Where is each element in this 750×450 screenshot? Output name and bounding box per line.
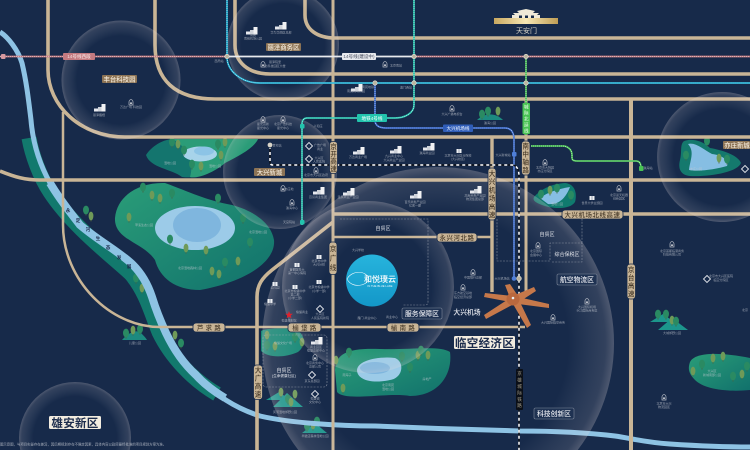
halo: service zone	[282, 201, 454, 373]
Daguang expressway	[257, 222, 333, 450]
label: line 14 west: 14号线西段	[67, 53, 91, 60]
POIs: airport area: 北京首都临港商务	[660, 248, 684, 253]
POIs: Daxing town: 黄村站	[272, 142, 282, 148]
label: airport economic zone: 临空经济区	[455, 336, 514, 350]
river name: 展	[127, 264, 132, 270]
halo: Fengtai	[62, 20, 180, 140]
POIs: north west: 南苑	[250, 32, 256, 37]
small hill parks: 凤河湿地郊野公园	[273, 409, 297, 414]
POIs: project surroundings: 第二部	[290, 292, 300, 296]
river name	[66, 207, 132, 270]
road label: Jingkai: 速	[330, 164, 337, 173]
road label: south axis: 路	[522, 166, 529, 174]
label: line 14 construction: 14号线(建设中)	[343, 53, 375, 60]
POIs: Daxing town: 义和庄	[313, 123, 323, 128]
park: east	[689, 352, 750, 391]
halo: Daxing	[223, 115, 337, 229]
POIs: airport area: 北京市大兴区医院	[709, 273, 733, 278]
POIs: Daxing town	[257, 117, 367, 224]
metro line 4	[302, 0, 414, 225]
POIs: central north: 世界大学主题园	[581, 200, 603, 205]
label: Yizhuang: 亦庄新城	[724, 140, 750, 149]
POIs: central north: 瀛海站	[643, 165, 653, 170]
road label: Jingguang: 广	[330, 254, 337, 263]
road label: airport expressway: 大	[489, 169, 496, 178]
road label: Jingtai: 速	[628, 289, 635, 298]
intercity green line north	[525, 57, 527, 135]
green branch	[531, 146, 641, 168]
park: east: 新城南部公园	[703, 372, 721, 377]
road label: airport expressway	[488, 168, 496, 220]
label: airport line: 大兴机场线	[447, 125, 470, 132]
road label: south axis: 轴	[522, 158, 529, 166]
POIs: north west: 万达广场·科技园	[120, 104, 142, 109]
road label: Jingtai	[627, 264, 636, 299]
ring road 2	[48, 0, 750, 137]
POIs: airport area: 中国银行总部	[464, 274, 482, 280]
label: bonded zone: 综合保税区	[554, 251, 580, 258]
label: Lize: 丽泽商务区	[268, 42, 300, 51]
label: free trade zone north: 自贸区	[375, 225, 391, 232]
park: large wetland with lake: 北京湿地公园	[249, 229, 267, 234]
Jingxiong intercity railway	[270, 146, 519, 450]
project logo	[346, 254, 398, 306]
POIs: airport area: 大兴国际机场	[578, 304, 596, 309]
label: Xiongan: 雄安新区	[51, 416, 99, 430]
cyan line	[227, 0, 750, 83]
POIs: project surroundings: (小学一部)	[312, 288, 326, 293]
dashed zone outlines	[263, 219, 582, 387]
Yongxing north road	[333, 236, 492, 238]
road label: airport expressway: 场	[489, 195, 496, 203]
road label: south axis	[522, 141, 530, 175]
label: free trade zone life health: (生命健康社区)	[272, 373, 296, 378]
POIs: project surroundings: 北京商务中心	[306, 360, 324, 365]
label: intercity north: 际	[524, 110, 529, 117]
POIs: project surroundings: 榆垡总部中心	[307, 348, 325, 352]
POIs: central north: 北京市大院园	[536, 164, 554, 170]
POIs: Daxing town: 北京广告科技	[274, 121, 292, 126]
park: south lake	[334, 346, 450, 397]
red star project marker	[285, 311, 293, 318]
label: intercity north: 北	[524, 116, 529, 123]
road label: south axis: 南	[522, 142, 529, 150]
POIs: project surroundings: 北京市榆垡中学	[308, 284, 330, 289]
POIs: airport area: 大兴国际临空商务	[541, 320, 565, 324]
park: Yizhuang	[679, 137, 741, 176]
POIs: project surroundings: 大兴区	[315, 311, 325, 316]
park: north Daxing	[146, 138, 258, 177]
POIs: north west	[93, 22, 412, 117]
point-of-interest labels	[93, 22, 748, 409]
river name: 发	[117, 254, 122, 261]
POIs: Daxing town: 天宫院站	[283, 219, 295, 224]
label: metro line 4	[357, 114, 387, 122]
road label: Daguang: 广	[255, 374, 262, 383]
river name: 河	[86, 226, 91, 232]
label: airport line	[443, 124, 473, 132]
halo: Lize	[227, 0, 339, 101]
POIs: central north: (大兴校区)	[451, 156, 465, 161]
road label: airport expressway: 高	[489, 202, 496, 211]
river wide section	[50, 183, 225, 398]
POIs: central north: 物流集团总部	[466, 196, 484, 201]
park: south lake: 湿地公园	[382, 386, 394, 391]
Jingkai expressway	[332, 0, 334, 450]
POIs: project surroundings: 京东总部园	[304, 378, 320, 383]
road label: Jingtai: 高	[628, 281, 635, 290]
park: south lake: 北京南苑	[382, 382, 394, 387]
transfer stations	[225, 54, 528, 281]
zone: free trade north	[340, 219, 428, 305]
POIs: project surroundings: 文化中心	[309, 399, 321, 404]
POIs: project surroundings: 大兴学校	[352, 247, 364, 252]
POIs: project surroundings: 榆垡中学	[264, 301, 276, 306]
river bank greenery	[29, 138, 217, 394]
label: logistics zone: 航空物流区	[560, 275, 594, 284]
POIs: Daxing town: 北京市大兴区政府	[304, 172, 328, 177]
road label: Yunan: 榆南路	[391, 323, 417, 332]
POIs: project surroundings: 首都医科大	[289, 266, 305, 272]
zone: free trade airport	[497, 219, 582, 262]
road label: Jingkai: 开	[330, 150, 337, 158]
POIs: airport area: 东方航空基地	[454, 290, 472, 295]
line 14 under construction	[227, 56, 414, 58]
airport line	[375, 83, 514, 278]
park: south lake: 房地产	[422, 376, 432, 381]
road label: south axis: 中	[522, 150, 529, 158]
POIs: project surroundings: 商业中心	[386, 314, 398, 319]
road label: Yufa	[288, 323, 321, 332]
park: south lake: 南海子	[342, 372, 352, 377]
icon: Tiananmen	[494, 9, 558, 35]
POIs: Daxing town: 亦庄地	[284, 186, 294, 191]
POIs: project surroundings: 总部公司	[309, 364, 321, 368]
POIs: airport area: 北京市大兴	[656, 400, 672, 406]
label: line 14 construction	[342, 53, 376, 60]
POIs: project surroundings: 榆垡规划馆	[281, 318, 297, 322]
blue station airport	[512, 276, 516, 281]
label: free trade zone: 自贸区	[539, 231, 555, 238]
road label: Jingkai	[330, 142, 338, 174]
label: Jingxiong railway: 雄	[517, 377, 522, 384]
POIs: project surroundings: 北京市中学	[311, 258, 327, 263]
park: east: 大兴区	[707, 368, 717, 373]
riverside trees	[83, 206, 184, 348]
POIs: project surroundings: 商业园区	[310, 344, 322, 349]
POIs: north west: 南苑机场公园	[347, 88, 365, 93]
label: free trade zone life health: 自贸区	[276, 367, 292, 374]
POIs: airport area	[454, 166, 748, 409]
POIs: central north: 高新商务产业园	[464, 192, 486, 198]
line stations	[1, 54, 6, 59]
label: intercity north: 城	[524, 104, 529, 111]
label: Daxing new town: 大兴新城	[257, 167, 283, 176]
POIs: central north: 北京蓝天机器	[610, 192, 628, 197]
disclaimer: 图示意图，与项目实景存在差异，因后期规划存在不确定因素，具体内容以政府最终批准的项目规划方案为准。	[0, 442, 166, 446]
POIs: north west: 华为华丽区总部	[270, 30, 292, 34]
POIs: airport area: 北京国际	[530, 248, 542, 253]
label: service zone	[402, 308, 442, 319]
POIs: project surroundings: 第一中心病院	[288, 270, 306, 275]
label: intercity north	[522, 103, 530, 134]
POIs: project surroundings: 榆垡商业	[296, 309, 308, 314]
label: logistics zone	[557, 274, 597, 285]
POIs: Daxing town: 人民医院	[313, 158, 325, 164]
POIs: north west: 丽泽院里	[269, 59, 281, 64]
POIs: central north: 亦庄分院区	[537, 168, 553, 173]
small hill parks: 半壁店森林湿地公园	[301, 433, 329, 438]
POIs: Daxing town: 商业	[317, 146, 323, 151]
POIs: airport area: 临空经济总部	[454, 294, 472, 299]
label: Jingxiong railway: 路	[517, 402, 522, 409]
POIs: Daxing town: 星光高新	[257, 121, 269, 126]
Jingtai expressway	[629, 99, 633, 450]
POIs: airport area: 科技有限公司	[663, 252, 681, 256]
POIs: project surroundings: 幼儿园	[270, 284, 280, 290]
label: Jingxiong railway: 城	[517, 383, 522, 390]
POIs: central north: 大兴广播电视台	[441, 111, 463, 116]
river name: 态	[106, 244, 111, 250]
park: large wetland with lake: 翠溪生态公园	[135, 222, 153, 227]
POIs: central north: 亿客一期	[409, 202, 421, 208]
river name: 永	[66, 207, 71, 213]
park: large wetland with lake	[115, 183, 274, 290]
road labels	[193, 141, 636, 400]
small hill parks: 瀛海公园	[484, 120, 496, 125]
stations	[1, 54, 644, 281]
road label: airport north line: 大兴机场北线高速	[565, 210, 620, 219]
road label: airport expressway: 兴	[489, 177, 496, 186]
road y180	[0, 171, 750, 180]
POIs: project surroundings: 人民医院新院	[311, 315, 329, 320]
label: tech innovation zone: 科技创新区	[537, 409, 571, 418]
thin road	[63, 112, 525, 327]
label: Jingxiong railway: 际	[517, 389, 522, 396]
teal station top	[300, 124, 304, 128]
road label: Jingtai: 台	[628, 273, 635, 282]
POIs: Daxing town: 大兴区	[314, 155, 324, 160]
road label: airport expressway: 速	[489, 210, 496, 219]
POIs: Daxing town: 万达商业广场	[349, 154, 367, 159]
small hill parks: 儿童公园	[129, 340, 141, 345]
green terminal station	[639, 166, 644, 171]
POIs: Daxing town: 广告广场	[314, 142, 326, 147]
label: Daxing new town	[254, 167, 285, 176]
POIs: airport area: BC3国际商务区	[577, 308, 597, 312]
road label: Jingtai: 京	[628, 265, 635, 274]
zone: life health	[263, 335, 327, 387]
POIs: Daxing town: 星光中心	[277, 125, 289, 130]
small hill parks	[83, 107, 688, 438]
POIs: airport area: 大兴机场站	[494, 276, 510, 280]
POIs: central north: 北京市大兴区分院校	[444, 152, 472, 158]
road label: Yongxing north	[437, 233, 477, 242]
label: line 14 west	[63, 53, 95, 60]
label: free trade zone life health	[272, 367, 296, 378]
POIs: project surroundings: 雁门·商业中心	[358, 315, 376, 320]
park: north Daxing: 湿地公园	[164, 160, 176, 165]
POIs: airport area: 会展中心	[530, 252, 542, 257]
POIs: airport area: 物流园区	[658, 404, 670, 409]
road label: Yongxing north: 永兴河北路	[440, 233, 474, 242]
label: Jingxiong railway: 京	[517, 370, 522, 377]
ring road 5	[305, 0, 750, 38]
small hill parks: 大城郊野公园	[663, 330, 681, 335]
road label: Luqiu: 芦求路	[197, 323, 223, 332]
label: metro line 4: 地铁4号线	[362, 115, 383, 122]
south axis road	[524, 99, 528, 292]
POIs: north west: 丽泽雁栖	[93, 112, 105, 117]
ring road 4	[235, 0, 750, 74]
label: Jingxiong railway	[516, 369, 523, 410]
POIs: central north: 瀛海商业园	[419, 150, 435, 155]
halo: airport economy zone	[262, 167, 614, 450]
road label: Yufa: 榆垡路	[292, 323, 319, 332]
label: Fengtai tech park: 丰台科技园	[104, 74, 135, 83]
airport north line	[333, 212, 750, 216]
POIs: project surroundings: 北京市榆垡中学	[284, 288, 306, 293]
ring road 3	[155, 0, 750, 99]
park: large wetland with lake: 北京湿地森林公园	[178, 265, 202, 270]
POIs: north west: 北京南站	[390, 62, 402, 68]
POIs: Daxing town: 温泉商业产业园	[337, 194, 359, 199]
blue station north	[512, 152, 516, 156]
road label: Yunan	[387, 323, 419, 332]
park: Yizhuang: 亦庄公园	[690, 166, 702, 171]
road label: Daguang: 高	[255, 382, 262, 391]
label: Daxing airport: 大兴机场	[453, 308, 481, 316]
road label: Jingguang: 京	[330, 244, 337, 253]
road label: Luqiu	[193, 323, 225, 332]
park: airport north	[534, 183, 576, 208]
POIs: north west: 西局站	[214, 58, 224, 63]
line labels	[63, 53, 530, 410]
POIs: central north: 创新园区	[613, 196, 625, 200]
POIs: central north: 百乐商务产业园	[404, 199, 426, 204]
POIs: central north: 大兴商业产业园	[383, 157, 405, 162]
project logo: 和悦璞云	[364, 274, 396, 284]
park: Yuhua south	[261, 328, 304, 356]
icon: Daxing airport terminal	[484, 284, 549, 328]
label: Jingxiong railway: 铁	[517, 396, 522, 403]
label: service zone: 服务保障区	[405, 309, 439, 318]
airport expressway	[490, 137, 494, 292]
road label: Jingguang: 线	[330, 263, 337, 272]
POIs: airport area: 北京	[742, 307, 748, 312]
project logo: IN THE BLUE LAKE	[367, 284, 393, 288]
POIs: project surroundings: 大兴分校	[313, 262, 325, 266]
POIs: Daxing town: 瀛海中心	[286, 205, 298, 210]
POIs: central north: 九兴商业中心	[385, 153, 403, 158]
POIs: project surroundings	[264, 247, 398, 404]
road label: Daguang: 速	[255, 390, 262, 399]
POIs: north west: 北科技园区大楼	[264, 63, 286, 68]
POIs: project surroundings: 榆垡镇	[310, 396, 320, 400]
river name: 定	[76, 217, 81, 224]
park: airport north: 湿地公园	[551, 201, 563, 206]
halo: Yizhuang	[657, 92, 750, 222]
POIs: Daxing town: 百货商业集团	[309, 194, 327, 199]
POIs: Daxing town: 星光中心	[257, 125, 269, 130]
POIs: north west: 南苑机场公园	[244, 36, 262, 40]
teal station bottom	[300, 220, 304, 224]
POIs: airport area: 临空分院区	[713, 277, 729, 282]
park: north Daxing: 湿地公园	[209, 163, 221, 168]
road label: Daguang: 大	[255, 366, 262, 375]
label: tech innovation zone	[534, 408, 574, 419]
road label: Jingkai: 京	[330, 142, 337, 151]
road label: airport expressway: 机	[489, 185, 496, 194]
road label: Jingguang	[329, 242, 337, 274]
icon: Tiananmen: 天安门	[516, 26, 537, 35]
POIs: central north	[383, 106, 653, 208]
road label: Jingkai: 高	[330, 157, 337, 166]
halo: Xiongan	[19, 382, 131, 450]
road label: Daguang	[254, 365, 262, 400]
POIs: north west: 瀛门西站	[400, 84, 412, 90]
park: Yuhua south: 榆垡文化广场	[274, 340, 292, 345]
POIs: project surroundings: (小学二部)	[288, 295, 302, 300]
line 14 west	[0, 56, 750, 58]
Huangcun station pin	[267, 142, 273, 148]
label: intercity north: 线	[524, 128, 529, 134]
POIs: central north: 大兴新城站	[495, 152, 511, 157]
POIs: north west: 南苑地铁	[362, 84, 374, 89]
river name: 生	[96, 235, 101, 241]
label: intercity north: 延	[524, 122, 529, 129]
